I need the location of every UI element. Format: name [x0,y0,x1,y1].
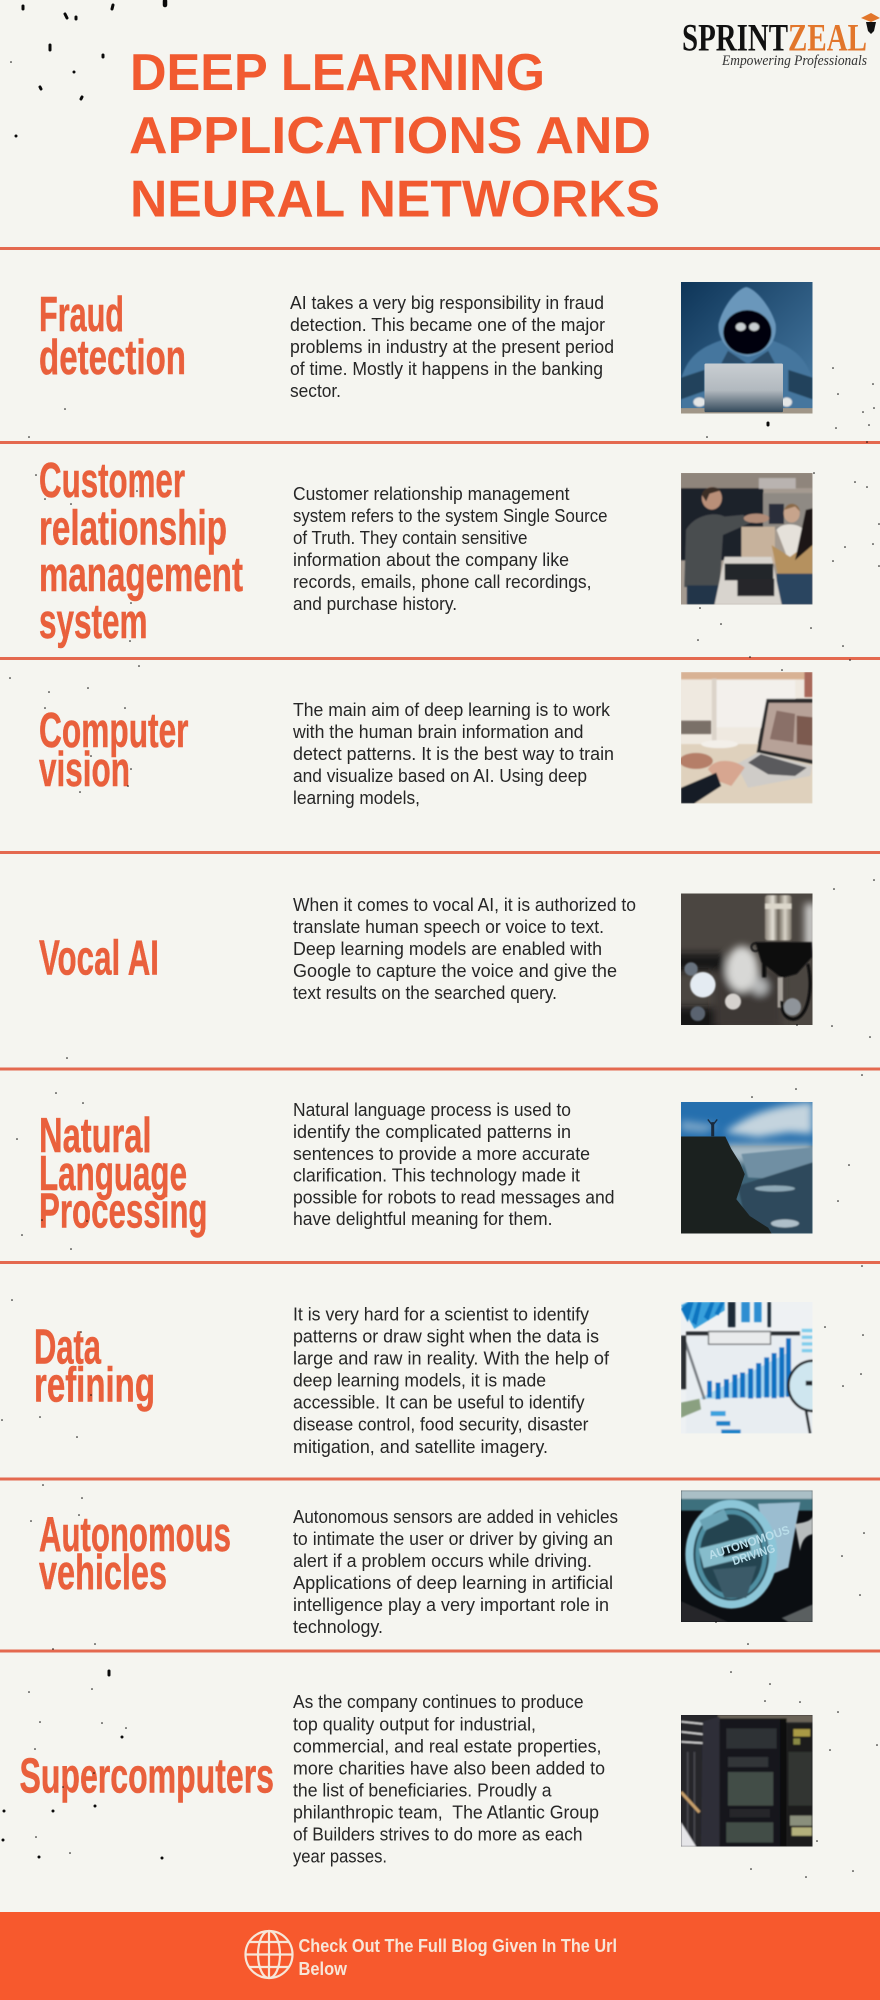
text block: fraud detection: problems in industry at the present period [290,337,614,357]
text block: data refining: large and raw in reality. With the help of [293,1348,610,1368]
panel: vocal AI [39,894,815,1031]
text block: data refining: patterns or draw sight when the data is [293,1326,599,1346]
heading: customer relationship management system: management [39,548,243,602]
heading: fraud detection: detection [39,331,186,385]
text block: customer relationship management: information about the company like [293,550,569,570]
text block: data refining: disease control, food security, disaster [293,1414,588,1434]
text block: customer relationship management [293,484,608,614]
text block: computer vision: The main aim of deep learning is to work [293,700,611,720]
text block: supercomputers: As the company continues to produce [293,1692,584,1712]
logo: Sprintzeal: SPRINT [682,16,788,60]
heading: customer relationship management system: system [39,595,148,649]
text block: supercomputers: year passes. [293,1846,387,1866]
footer banner [0,1912,880,2000]
heading: natural language processing: Language [39,1147,187,1201]
heading: computer vision [39,704,188,797]
text block: customer relationship management: system refers to the system Single Source [293,506,608,526]
heading: computer vision: Computer [39,704,188,758]
text block: vocal AI: Deep learning models are enabled with [293,939,602,959]
logo: Sprintzeal: Empowering Professionals [721,53,867,69]
text block: supercomputers: more charities have also been added to [293,1758,605,1778]
text block: supercomputers: philanthropic team, The Atlantic Group [293,1802,599,1822]
footer text: Below [298,1959,348,1979]
text block: customer relationship management: of Truth. They contain sensitive [293,528,528,548]
text block: computer vision: detect patterns. It is the best way to train [293,744,614,764]
image: autonomous driving steering wheel: DRIVING [730,1541,777,1568]
text block: supercomputers: of Builders strives to do more as each [293,1824,582,1844]
text block: autonomous vehicles: alert if a problem occurs while driving. [293,1551,592,1571]
text block: fraud detection: detection. This became one of the major [290,315,605,335]
image: server rack [681,1715,812,1846]
text block: fraud detection [290,293,614,401]
heading: customer relationship management system [39,454,243,649]
panel: natural language processing [39,1100,812,1238]
footer text [298,1936,617,1979]
text block: natural language processing: have delightful meaning for them. [293,1209,552,1229]
text block: autonomous vehicles: technology. [293,1617,383,1637]
heading: natural language processing: Processing [39,1184,208,1238]
text block: vocal AI: Google to capture the voice and give the [293,961,617,981]
text block: vocal AI: When it comes to vocal AI, it is authorized to [293,895,636,915]
heading: customer relationship management system: relationship [39,502,227,556]
text block: data refining: It is very hard for a scientist to identify [293,1304,589,1324]
text block: autonomous vehicles [293,1507,618,1637]
text block: natural language processing [293,1100,614,1229]
text block: vocal AI [293,895,636,1003]
text block: fraud detection: sector. [290,381,341,401]
text block: supercomputers: the list of beneficiaries. Proudly a [293,1780,552,1800]
text block: fraud detection: of time. Mostly it happens in the banking [290,359,603,379]
text block: computer vision: and visualize based on AI. Using deep [293,766,587,786]
heading: autonomous vehicles [39,1508,231,1600]
image: person on cliff above valley [681,1102,812,1234]
heading: natural language processing [39,1109,208,1238]
heading: data refining: Data [34,1320,101,1374]
text block: natural language processing: Natural language process is used to [293,1100,571,1120]
text block: autonomous vehicles: intelligence play a very important role in [293,1595,609,1615]
title: DEEP LEARNING [130,44,545,102]
image: hooded hacker at laptop [681,282,812,414]
text block: supercomputers: top quality output for industrial, [293,1714,536,1734]
text block: supercomputers: commercial, and real estate properties, [293,1736,602,1756]
text block: natural language processing: possible for robots to read messages and [293,1188,614,1208]
title: NEURAL NETWORKS [130,170,660,228]
text block: computer vision [292,700,614,808]
title [129,44,660,228]
text block: natural language processing: clarification. This technology made it [293,1166,580,1186]
panel: data refining [34,1302,839,1457]
panel: fraud detection [39,282,812,414]
icon: globe [246,1931,292,1978]
text block: computer vision: learning models, [293,788,420,808]
text block: autonomous vehicles: Applications of deep learning in artificial [293,1573,613,1593]
text block: fraud detection: AI takes a very big responsibility in fraud [290,293,604,313]
text block: data refining: deep learning models, it is made [293,1370,546,1390]
text block: data refining: accessible. It can be useful to identify [293,1392,584,1412]
image: autonomous driving steering wheel: AUTONOMOUS [707,1523,791,1562]
text block: customer relationship management: Customer relationship management [293,484,570,504]
text block: data refining [293,1304,610,1457]
text block: vocal AI: translate human speech or voice to text. [293,917,604,937]
footer text: Check Out The Full Blog Given In The Url [298,1936,617,1956]
text block: customer relationship management: records, emails, phone call recordings, [293,572,592,592]
text block: computer vision: with the human brain information and [292,722,584,742]
heading: vocal AI: Vocal AI [39,932,159,986]
text block: autonomous vehicles: Autonomous sensors are added in vehicles [293,1507,618,1527]
text block: vocal AI: text results on the searched query. [293,983,557,1003]
panel: customer relationship management system [39,454,812,649]
heading: autonomous vehicles: vehicles [39,1546,167,1600]
image: hands on laptop [679,672,812,804]
divider lines [0,247,880,1652]
image: studio microphone with bokeh [674,894,815,1031]
title: APPLICATIONS AND [129,107,651,165]
text block: autonomous vehicles: to intimate the user or driver by giving an [293,1529,613,1549]
panel: computer vision [39,672,812,808]
panel: supercomputers [20,1692,812,1866]
heading: supercomputers: Supercomputers [20,1750,274,1804]
heading: fraud detection: Fraud [39,288,124,342]
image: bar chart on clipboard [681,1302,839,1434]
text block: natural language processing: sentences to provide a more accurate [293,1144,590,1164]
text block: customer relationship management: and purchase history. [293,594,457,614]
heading: data refining: refining [34,1358,155,1412]
heading: data refining [34,1320,155,1412]
heading: computer vision: vision [39,743,130,797]
heading: natural language processing: Natural [39,1109,152,1163]
image: shop assistant handing bag to customers [681,473,812,604]
text block: natural language processing: identify the complicated patterns in [293,1122,571,1142]
heading: autonomous vehicles: Autonomous [39,1508,231,1562]
text block: supercomputers [293,1692,605,1866]
text block: data refining: mitigation, and satellite imagery. [293,1437,548,1457]
panel: autonomous vehicles [39,1490,812,1637]
heading: fraud detection [39,288,186,385]
image: autonomous driving steering wheel [681,1490,812,1622]
heading: customer relationship management system: Customer [39,454,185,508]
logo: Sprintzeal [682,13,880,69]
